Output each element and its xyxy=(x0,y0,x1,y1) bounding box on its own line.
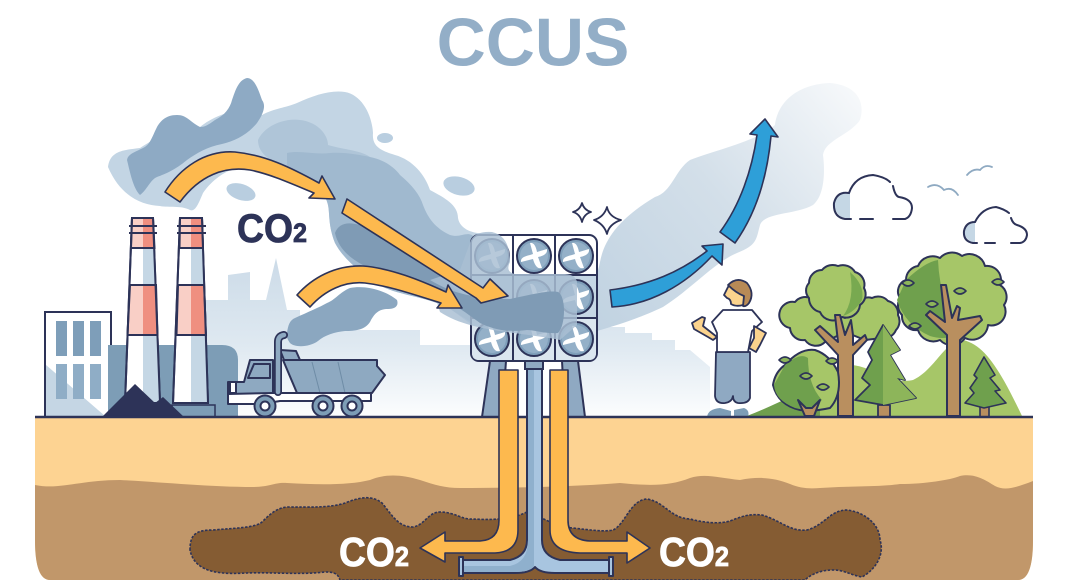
chimney right xyxy=(173,218,208,403)
person xyxy=(692,280,766,417)
blue injection pipe xyxy=(459,369,613,576)
chimney left xyxy=(125,218,160,403)
cloud left xyxy=(834,175,912,219)
sparkle icons xyxy=(573,203,621,234)
yellow arrow: from truck xyxy=(297,266,462,308)
CO2 label left: CO2 xyxy=(339,529,409,575)
hill xyxy=(747,340,1022,416)
tree: large right xyxy=(897,253,1007,416)
yellow arrow: straight into filter xyxy=(342,199,508,303)
smoke: truck exhaust cloud xyxy=(287,287,398,346)
CO2 label right: CO2 xyxy=(659,529,729,575)
cloud right xyxy=(964,207,1027,243)
birds xyxy=(928,166,992,195)
blue arrow: upper xyxy=(720,119,778,243)
smoke: light polluted cloud xyxy=(108,92,567,339)
bush tree xyxy=(773,350,839,416)
ground line xyxy=(35,416,1033,418)
smoke: dark top plume xyxy=(127,78,264,195)
yellow injection pipe left with arrow xyxy=(420,370,518,562)
smoke: mid upper cloud xyxy=(258,120,370,175)
smoke: right clean air plume xyxy=(497,83,862,348)
hill shade xyxy=(747,382,820,416)
smoke: mid polluted cloud xyxy=(287,152,510,340)
factory building xyxy=(45,312,111,417)
capture unit legs xyxy=(482,361,585,417)
title: CCUS xyxy=(437,4,629,80)
blue arrow: lower xyxy=(610,244,723,307)
dense smoke overlay xyxy=(430,280,564,333)
direct air capture fan panel xyxy=(471,235,597,361)
smoke: small puffs xyxy=(224,133,477,204)
pine tree: large xyxy=(855,325,916,417)
yellow injection pipe right with arrow xyxy=(550,370,650,563)
ground: sand layer xyxy=(35,417,1033,580)
coal pile xyxy=(102,384,184,417)
dump truck xyxy=(228,335,385,416)
CO2 label top: CO2 xyxy=(237,207,307,251)
underground CO2 storage reservoir xyxy=(190,498,881,580)
yellow arrow: from chimneys xyxy=(165,152,335,202)
backdrop block behind chimneys xyxy=(108,345,238,417)
smoke overlay on panel xyxy=(430,232,577,340)
tree: large left xyxy=(779,265,900,416)
pine tree: small xyxy=(965,357,1006,417)
ground: soil layer xyxy=(35,475,1033,580)
background skyline xyxy=(198,258,710,417)
smoke: lower dark cloud xyxy=(335,223,563,333)
chimney base xyxy=(172,405,215,417)
